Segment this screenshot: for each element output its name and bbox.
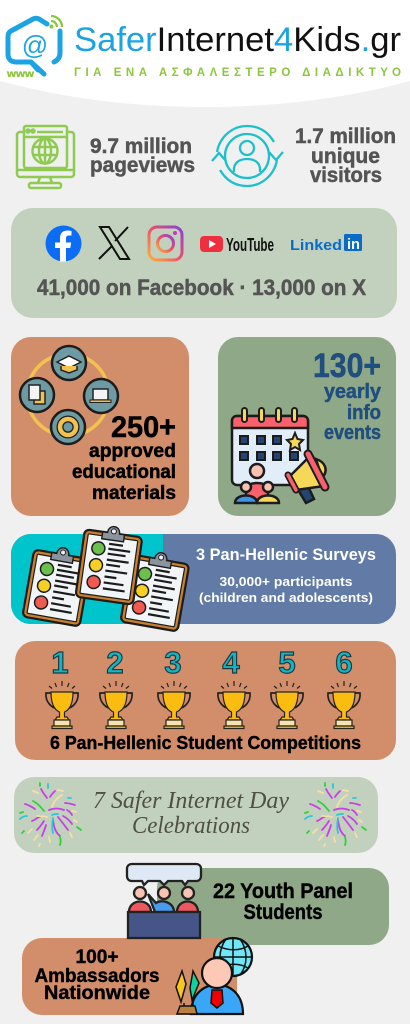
ambassadors text: Ambassadors xyxy=(34,966,160,987)
survey text: 3 Pan-Hellenic Surveys xyxy=(196,545,376,564)
competition numbers: 3 xyxy=(164,645,182,680)
logo icon: house with at-sign: @ xyxy=(22,30,48,60)
youth panel text xyxy=(213,880,353,924)
icon: YouTube: YouTube xyxy=(226,235,274,255)
stat: pageviews: 9.7 million xyxy=(90,135,192,158)
panel: info events xyxy=(218,337,396,516)
competitions label: 6 Pan-Hellenic Student Competitions xyxy=(50,733,361,753)
stat text: yearly xyxy=(324,381,382,403)
stat text: educational xyxy=(72,462,176,483)
ambassadors text: Nationwide xyxy=(44,983,150,1004)
ambassadors text xyxy=(34,947,160,1004)
panel: educational materials xyxy=(11,337,189,516)
youth panel text: Students xyxy=(244,901,322,924)
icon: youth panel desk and speakers xyxy=(127,864,201,938)
stat: unique visitors: visitors xyxy=(310,164,382,187)
panel: student competitions xyxy=(15,641,396,760)
white header background xyxy=(0,0,410,107)
stat: unique visitors: unique xyxy=(311,145,380,168)
competition numbers: 6 xyxy=(335,645,353,680)
icon: Facebook xyxy=(46,226,82,262)
icon: trophies xyxy=(46,681,360,728)
icon: unique visitor with arrows xyxy=(212,126,283,186)
panel: social media xyxy=(11,208,397,318)
follower counts: 41,000 on Facebook · 13,000 on X xyxy=(37,275,366,300)
panel: youth panel xyxy=(157,868,389,945)
stat text: 130+ xyxy=(313,347,381,385)
stat: pageviews: pageviews xyxy=(90,154,195,177)
stat text: materials xyxy=(92,483,176,504)
survey text xyxy=(196,545,376,605)
competition numbers: 2 xyxy=(106,645,124,680)
stat: unique visitors xyxy=(295,125,396,187)
stat text: 250+ xyxy=(111,411,176,444)
panel: surveys xyxy=(11,523,396,632)
panel: ambassadors xyxy=(22,938,237,1015)
youth panel text: 22 Youth Panel xyxy=(213,880,353,903)
icon: LinkedIn: in xyxy=(347,236,360,253)
icon: LinkedIn: Linked xyxy=(290,237,342,254)
icon: calendar with megaphone and people xyxy=(232,408,326,503)
icon: YouTube xyxy=(200,235,274,255)
stat text xyxy=(313,347,382,444)
stat text: events xyxy=(324,422,381,444)
celebration text xyxy=(93,788,289,839)
icon: fireworks right xyxy=(305,783,366,846)
icon: fireworks left xyxy=(20,783,81,846)
panel: Safer Internet Day xyxy=(14,777,378,853)
icon: monitor with globe xyxy=(17,126,74,188)
tagline: ΓΙΑ ΕΝΑ ΑΣΦΑΛΕΣΤΕΡΟ ΔΙΑΔΙΚΤΥΟ xyxy=(74,67,401,79)
celebration text: 7 Safer Internet Day xyxy=(93,788,289,814)
icon: education cycle xyxy=(20,346,118,444)
stat text xyxy=(72,411,176,504)
survey text: (children and adolescents) xyxy=(199,591,373,605)
competition numbers: 1 xyxy=(51,645,69,680)
stat text: approved xyxy=(89,441,176,462)
stat: pageviews xyxy=(90,135,195,177)
icon: X xyxy=(99,227,129,259)
competition numbers xyxy=(51,645,353,680)
logo icon: house with at-sign: www xyxy=(6,69,34,80)
icon: ambassador with globe and flags xyxy=(176,938,252,1014)
competition numbers: 4 xyxy=(222,645,240,680)
stat: unique visitors: 1.7 million xyxy=(295,125,396,148)
ambassadors text: 100+ xyxy=(76,947,118,968)
survey text: 30,000+ participants xyxy=(220,575,353,589)
icon: survey clipboards xyxy=(22,523,190,632)
title: SaferInternet4Kids.gr: SaferInternet4Kids.gr xyxy=(74,21,401,59)
icon: LinkedIn xyxy=(290,234,362,254)
icon: Instagram xyxy=(149,227,182,260)
stat text: info xyxy=(347,402,381,424)
competition numbers: 5 xyxy=(278,645,296,680)
celebration text: Celebrations xyxy=(132,813,250,839)
logo icon: house with at-sign xyxy=(6,16,62,80)
